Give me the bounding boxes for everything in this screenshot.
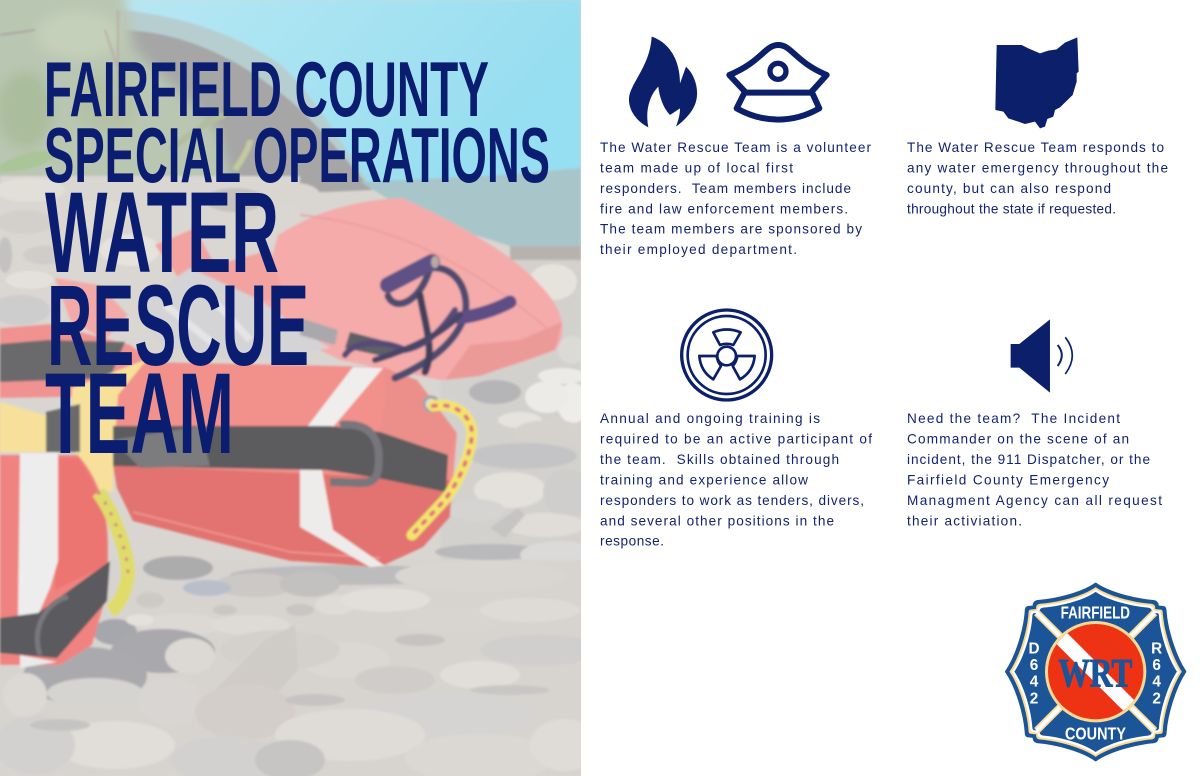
- logo: Fairfield County WRT badge: D: [1028, 640, 1040, 657]
- heading: Special Operations: SPECIAL OPERATIONS: [44, 111, 550, 199]
- kayak hull: [122, 0, 581, 261]
- text block: requesting the team: incident, the 911 Dispatcher, or the: [907, 452, 1150, 467]
- text block: response area: any water emergency throughout the: [907, 160, 1168, 176]
- text block: requesting the team: Need the team? The Incident: [907, 411, 1120, 426]
- text block: team makeup: [600, 140, 871, 257]
- text block: response area: county, but can also respond: [907, 181, 1111, 196]
- text block: requesting the team: [907, 411, 1162, 528]
- text block: training: responders to work as tenders, divers,: [600, 493, 864, 508]
- logo: Fairfield County WRT badge: FAIRFIELD: [1061, 603, 1130, 623]
- text block: training: training and experience allow: [600, 472, 808, 488]
- logo: Fairfield County WRT badge: COUNTY: [1065, 723, 1126, 743]
- panel: background photo of rescue throw bags on river stones: [0, 0, 600, 776]
- text block: requesting the team: Commander on the scene of an: [907, 432, 1129, 446]
- back red bag: [260, 198, 563, 380]
- logo: Fairfield County WRT badge: 6: [1030, 657, 1038, 674]
- logo: Fairfield County WRT badge: 2: [1152, 690, 1161, 707]
- text block: team makeup: The Water Rescue Team is a volunteer: [600, 140, 871, 155]
- yellow rope: [412, 397, 472, 535]
- logo: Fairfield County WRT badge: [1006, 584, 1185, 760]
- text block: requesting the team: Managment Agency can all request: [907, 493, 1162, 508]
- logo: Fairfield County WRT badge: WRT: [1058, 651, 1132, 696]
- webbing and carabiners: [55, 228, 400, 362]
- icon: Ohio map: [995, 37, 1079, 128]
- logo: Fairfield County WRT badge: 2: [1030, 690, 1038, 707]
- logo: Fairfield County WRT badge: 4: [1152, 674, 1161, 691]
- upper left bag: [0, 324, 150, 398]
- text block: training: and several other positions in the: [600, 514, 834, 528]
- text block: training: [600, 411, 872, 548]
- icon: radiation symbol: [682, 310, 772, 400]
- text block: response area: throughout the state if requested.: [907, 202, 1116, 216]
- text block: team makeup: team made up of local first: [600, 160, 793, 176]
- text block: training: required to be an active participant of: [600, 432, 872, 446]
- logo: Fairfield County WRT badge: 4: [1030, 674, 1039, 691]
- middle red bag: [113, 362, 457, 567]
- vegetation: [0, 0, 250, 190]
- yellow bag section: [0, 360, 146, 493]
- logo: Fairfield County WRT badge: 6: [1152, 657, 1161, 674]
- text block: response area: [907, 140, 1168, 216]
- right and lower stones: [0, 260, 600, 776]
- icon: police cap: [729, 45, 827, 120]
- icon: speaker: [1011, 319, 1072, 393]
- text block: team makeup: responders. Team members include: [600, 181, 851, 196]
- text block: response area: The Water Rescue Team responds to: [907, 140, 1164, 155]
- text block: team makeup: The team members are sponsored by: [600, 222, 862, 236]
- purple rope: [345, 256, 510, 378]
- heading: Team: TEAM: [45, 350, 234, 478]
- text block: team makeup: fire and law enforcement members.: [600, 202, 848, 216]
- heading: Fairfield County: FAIRFIELD COUNTY: [44, 45, 489, 133]
- front left bag: [0, 453, 128, 668]
- text block: training: the team. Skills obtained through: [600, 452, 839, 467]
- title: [44, 45, 550, 478]
- upper stones: [0, 176, 320, 336]
- icon: flame: [629, 37, 697, 127]
- heading: Rescue: RESCUE: [47, 262, 309, 390]
- heading: Water: WATER: [45, 169, 279, 297]
- text block: team makeup: their employed department.: [600, 242, 797, 257]
- text block: training: Annual and ongoing training is: [600, 411, 820, 426]
- text block: requesting the team: Fairfield County Emergency: [907, 472, 1109, 488]
- logo: Fairfield County WRT badge: R: [1151, 640, 1162, 657]
- text block: requesting the team: their activiation.: [907, 514, 1022, 528]
- text block: training: response.: [600, 534, 664, 548]
